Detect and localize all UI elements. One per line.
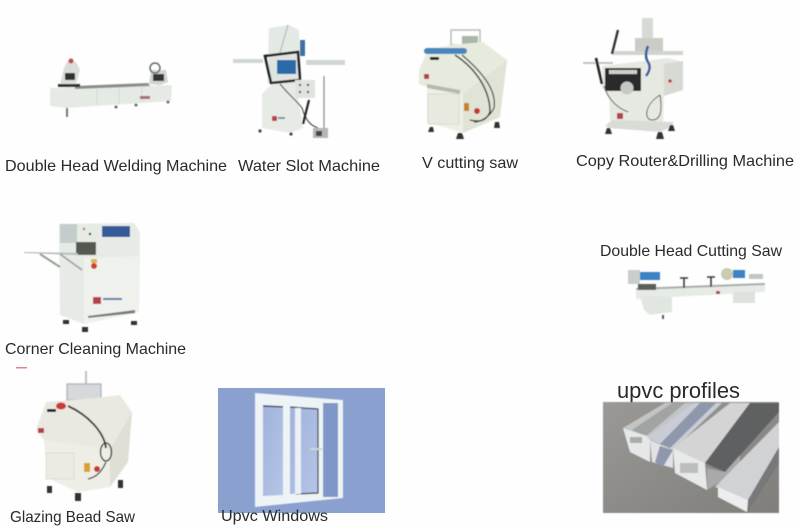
machine: double head cutting saw [628, 268, 765, 319]
caption: upvc windows: Upvc Windows [221, 508, 328, 525]
caption: double head cutting saw: Double Head Cutting Saw [600, 243, 782, 260]
machine: corner cleaning machine [24, 223, 140, 332]
caption: water slot machine: Water Slot Machine [238, 158, 380, 175]
caption: copy router and drilling machine: Copy Router&Drilling Machine [576, 153, 794, 170]
profile 4 [715, 422, 779, 500]
caption: V cutting saw: V cutting saw [422, 155, 518, 172]
red dash mark [16, 367, 27, 368]
machine: V cutting saw [419, 30, 507, 139]
caption: corner cleaning machine: Corner Cleaning Machine [5, 341, 186, 358]
panel: upvc profiles photo [603, 402, 779, 513]
caption: upvc profiles: upvc profiles [617, 378, 740, 403]
machine: water slot machine [233, 25, 345, 138]
profile 2 [647, 403, 722, 450]
profile 1 [623, 403, 693, 437]
panel: upvc window photo [218, 388, 385, 525]
caption: double head welding machine: Double Head Welding Machine [5, 158, 227, 175]
profile 3 [673, 403, 750, 463]
caption: glazing bead saw: Glazing Bead Saw [10, 509, 135, 526]
machine: copy router and drilling machine [583, 18, 683, 139]
window frame [255, 393, 343, 507]
machine: double head welding machine [50, 58, 172, 117]
machine: glazing bead saw [36, 371, 132, 501]
